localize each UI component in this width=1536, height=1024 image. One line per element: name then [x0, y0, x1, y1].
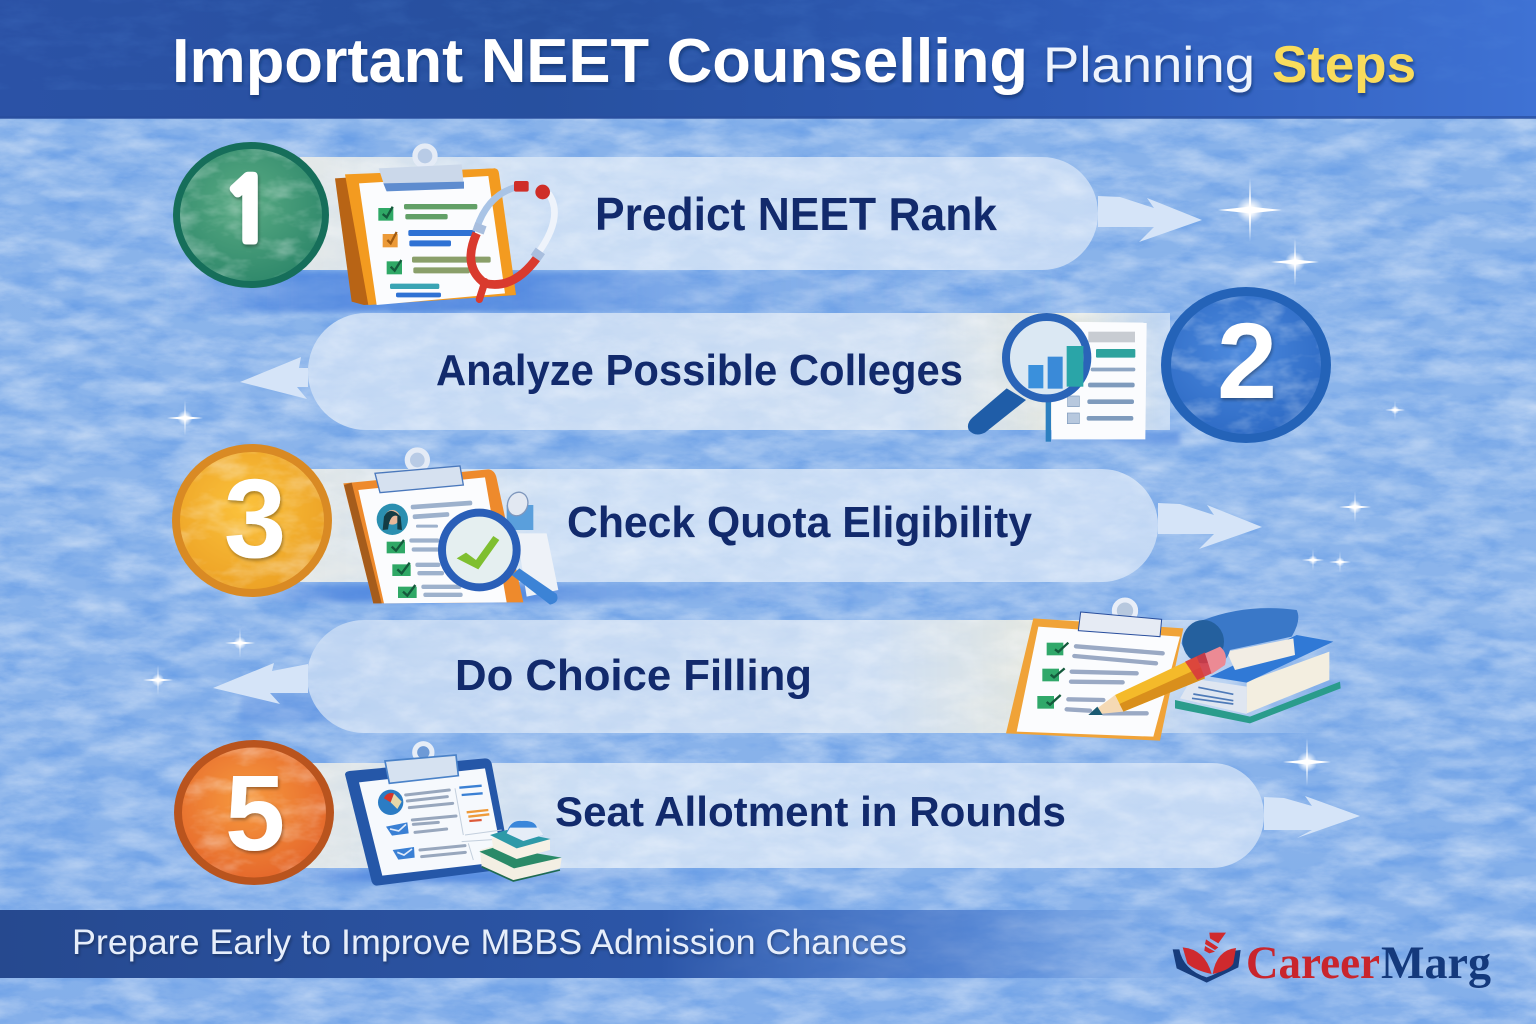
step 5 label: Seat Allotment in Rounds — [555, 788, 1066, 835]
sparkles — [143, 178, 1405, 786]
step 1 label: Predict NEET Rank — [595, 188, 997, 240]
number badge 5: 5 — [225, 752, 285, 873]
title text — [172, 27, 1416, 96]
arrow 3 — [1158, 503, 1262, 549]
icon: clipboard results and books — [345, 744, 562, 886]
title banner — [0, 0, 1536, 119]
arrow 5 — [1264, 796, 1360, 838]
icon: clipboard with magnifier check — [343, 450, 558, 605]
logo: CareerMarg — [1173, 933, 1491, 989]
step 1 panel — [165, 142, 1202, 312]
number badge 3 — [172, 444, 332, 597]
logo: CareerMarg: Marg — [1381, 937, 1491, 989]
number badge 2 — [1161, 287, 1331, 443]
arrow 4 — [213, 663, 308, 704]
arrow 2 — [240, 357, 308, 399]
title text: Important NEET Counselling — [172, 27, 1028, 96]
footer banner — [0, 910, 1200, 978]
arrow 1 — [1098, 196, 1202, 242]
number badge 5 — [174, 740, 334, 885]
logo: CareerMarg: Career — [1246, 937, 1380, 989]
step 4 panel — [213, 600, 1341, 741]
pill 1 — [300, 157, 1098, 270]
number badge 2: 2 — [1217, 300, 1277, 421]
pill 5 — [300, 763, 1264, 868]
pill 4 — [307, 620, 1340, 733]
number badge 1 — [173, 142, 329, 288]
title text: Planning — [1043, 37, 1255, 93]
icon: clipboard with stethoscope — [335, 146, 555, 305]
step 4 label: Do Choice Filling — [455, 651, 812, 700]
icon: clipboard, pencil and books — [1006, 600, 1341, 741]
step 2 label: Analyze Possible Colleges — [436, 346, 963, 395]
number badge 1: 1 — [221, 168, 275, 255]
step 3 panel — [172, 444, 1262, 605]
pill 2 — [308, 313, 1170, 430]
icon: magnifier with chart and document — [968, 317, 1147, 442]
number badge 3: 3 — [224, 456, 286, 581]
step 2 panel — [240, 287, 1331, 445]
footer tagline: Prepare Early to Improve MBBS Admission Chances — [72, 923, 907, 962]
step 5 panel — [174, 740, 1360, 886]
icon: open book logo — [1173, 933, 1241, 983]
title text: Steps — [1272, 36, 1416, 94]
step 3 label: Check Quota Eligibility — [567, 498, 1033, 547]
pill 3 — [300, 469, 1158, 582]
